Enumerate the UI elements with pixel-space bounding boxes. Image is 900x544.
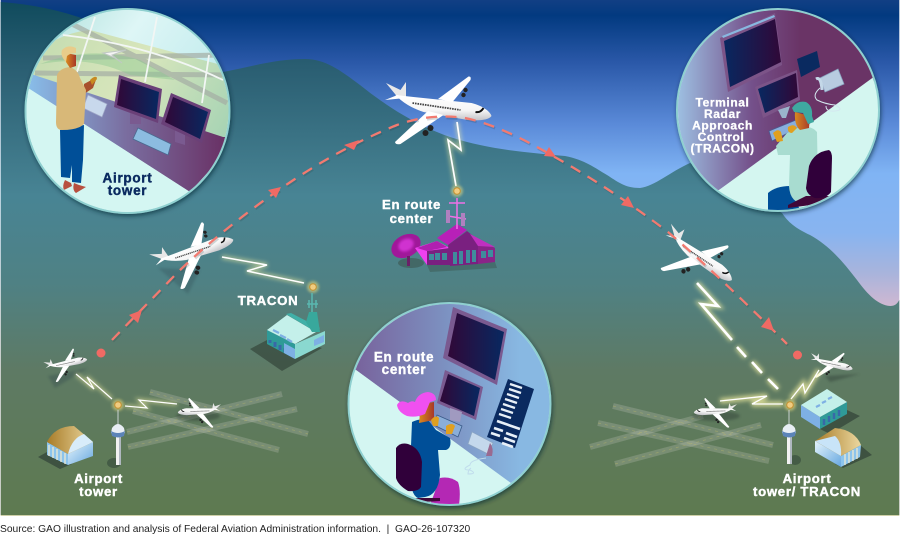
icon: right terminal hangar xyxy=(815,428,872,468)
label: left airport tower xyxy=(74,471,123,499)
airplane: en route cruise xyxy=(385,76,492,144)
label: en route center inset xyxy=(374,350,434,377)
icon: right airport tower xyxy=(782,410,801,465)
label: TRACON inset xyxy=(690,96,755,156)
label: en route center xyxy=(382,197,441,226)
icon: left airport tower xyxy=(107,410,125,468)
airplane: on right runway xyxy=(692,397,740,428)
signal: TRACON to aircraft xyxy=(222,257,319,293)
label: TRACON inset: Radar xyxy=(704,107,741,121)
runways: right airport xyxy=(590,406,773,464)
signal: right tower to aircraft xyxy=(697,283,819,411)
airplane: arriving xyxy=(811,351,860,382)
ground edge line xyxy=(1,515,899,516)
airplane: climbing xyxy=(146,215,245,294)
icon: TRACON building xyxy=(250,293,325,371)
airplane: on left runway xyxy=(176,397,222,428)
label: TRACON inset: Approach xyxy=(692,118,753,132)
signal: left tower to aircraft xyxy=(76,374,177,411)
icon: right TRACON building xyxy=(801,389,860,434)
label: en route center inset: center xyxy=(382,362,426,377)
airplane: departing xyxy=(42,346,92,388)
label: right airport tower and TRACON: tower/ TRACON xyxy=(753,484,861,499)
label: right airport tower and TRACON xyxy=(753,471,861,499)
label: TRACON inset: (TRACON) xyxy=(690,142,755,156)
label: TRACON inset: Control xyxy=(698,130,744,144)
source note: Source: GAO illustration and analysis of Federal Aviation Administration information. | GAO-26-107320 xyxy=(0,524,471,535)
label: airport tower inset: tower xyxy=(108,183,147,198)
label: right airport tower and TRACON: Airport xyxy=(783,471,831,486)
panel: en route center inset xyxy=(346,301,556,511)
panel: airport tower inset xyxy=(23,8,234,219)
label: en route center: En route xyxy=(382,197,441,212)
label: en route center inset: En route xyxy=(374,350,434,364)
panel: TRACON inset xyxy=(670,0,890,220)
signal: en route center to aircraft xyxy=(448,122,463,197)
airplane: descending xyxy=(654,219,743,300)
label: left airport tower: tower xyxy=(79,484,118,499)
label: left airport tower: Airport xyxy=(74,471,123,486)
label: airport tower inset: Airport xyxy=(103,170,152,186)
label: TRACON: TRACON xyxy=(238,293,298,308)
icon: en route center building xyxy=(387,198,497,272)
runways: left airport xyxy=(127,392,308,450)
icon: left terminal hangar xyxy=(38,426,93,469)
label: en route center: center xyxy=(390,211,433,226)
label: TRACON inset: Terminal xyxy=(696,96,749,110)
label: airport tower inset xyxy=(103,170,152,198)
flight path: dashed route xyxy=(96,117,802,359)
